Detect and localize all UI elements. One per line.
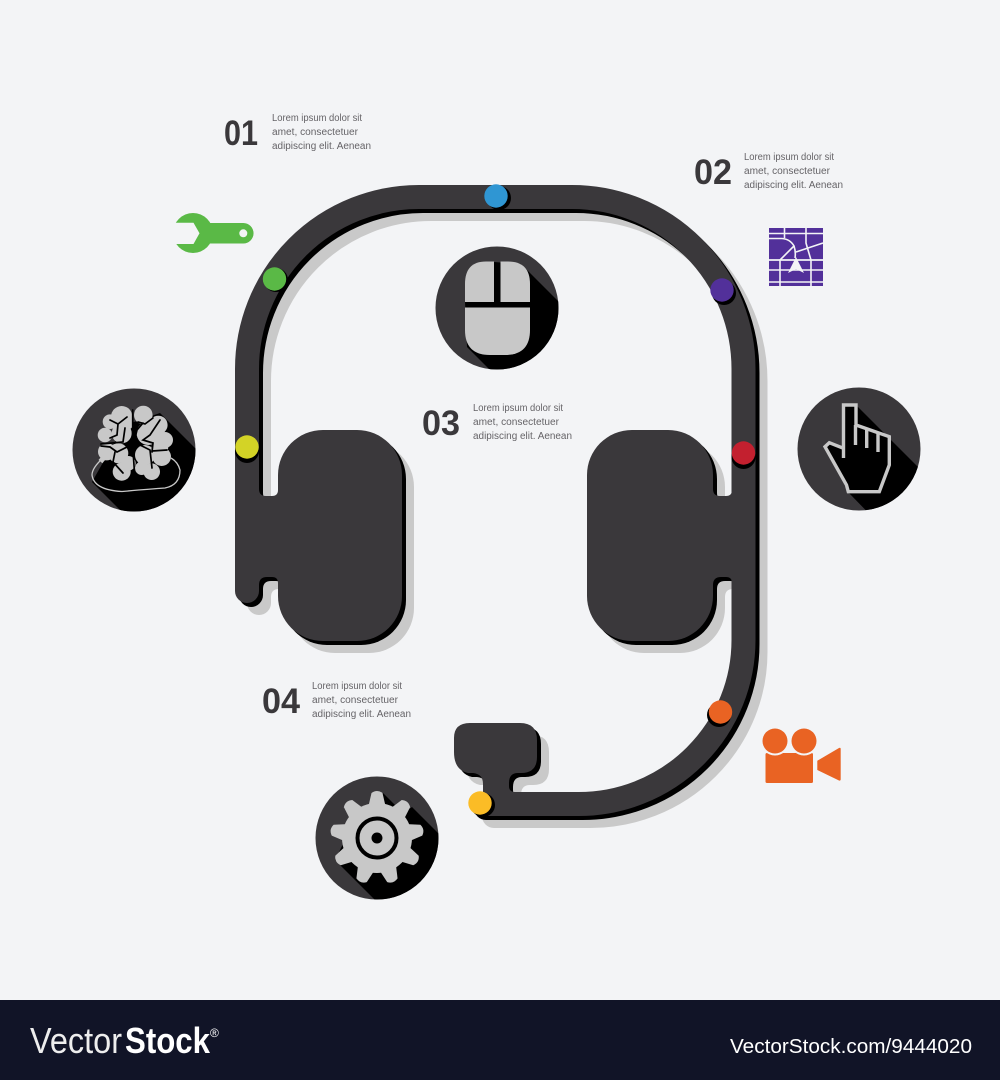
label 01: Lorem ipsum dolor sit [272, 113, 362, 124]
label 03: Lorem ipsum dolor sit [473, 403, 563, 414]
icon: movie camera [760, 726, 841, 783]
label 04: amet, consectetuer [312, 695, 399, 706]
icon: gear badge [316, 776, 438, 900]
label 04: Lorem ipsum dolor sit [312, 681, 402, 692]
label 04 [262, 681, 411, 721]
dot: green [263, 267, 288, 292]
label 02: Lorem ipsum dolor sit [744, 152, 834, 163]
label 01: 01 [224, 114, 258, 153]
label 03 [422, 403, 572, 443]
label 01 [224, 113, 371, 153]
label 01: amet, consectetuer [272, 127, 359, 138]
label 02: amet, consectetuer [744, 166, 831, 177]
icon: pointing hand badge [798, 388, 920, 510]
label 04: adipiscing elit. Aenean [312, 709, 411, 720]
label 03: 03 [422, 404, 460, 443]
icon: mouse badge [436, 246, 558, 370]
footer bar [0, 1000, 1000, 1080]
icon: map [769, 228, 823, 286]
footer bar: Stock [125, 1020, 211, 1061]
headset [247, 197, 756, 816]
label 04: 04 [262, 682, 301, 721]
footer bar: VectorStock.com/9444020 [730, 1036, 972, 1058]
label 02: 02 [694, 153, 732, 192]
dot: blue [484, 184, 511, 210]
footer bar: Vector [30, 1020, 122, 1061]
dot: red [732, 441, 756, 469]
dot: orange [707, 700, 732, 727]
label 03: adipiscing elit. Aenean [473, 431, 572, 442]
dot: yellow [468, 791, 495, 817]
label 02: adipiscing elit. Aenean [744, 180, 843, 191]
label 03: amet, consectetuer [473, 417, 560, 428]
label 02 [694, 152, 843, 192]
footer bar: ® [210, 1026, 219, 1040]
icon: brain badge [72, 388, 196, 512]
dot: purple [710, 278, 736, 305]
dot: lime [235, 435, 259, 463]
icon: wrench [170, 213, 254, 253]
label 01: adipiscing elit. Aenean [272, 141, 371, 152]
